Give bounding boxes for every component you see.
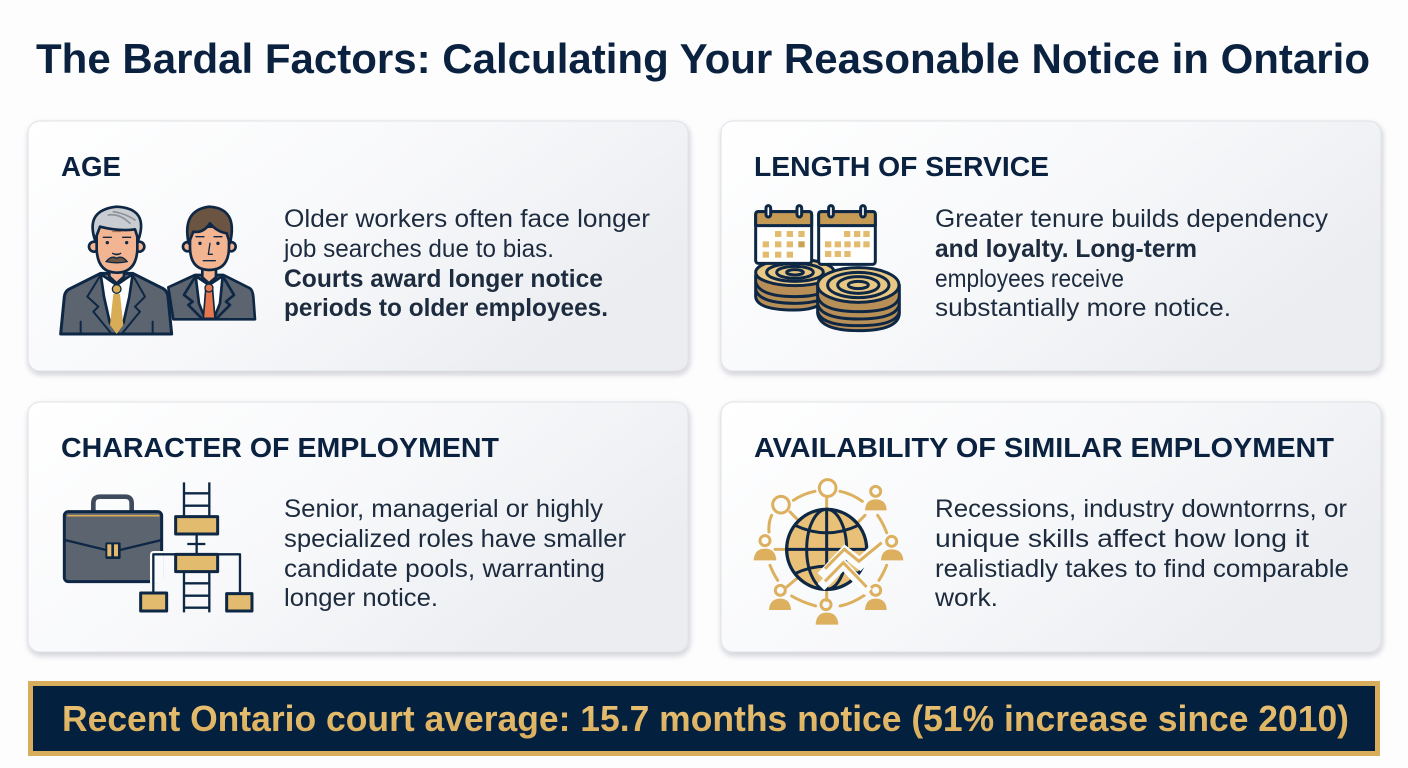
body text: age bbox=[283, 205, 650, 322]
body text: availability of similar employment: Recessions, industry downtorrns, or bbox=[935, 495, 1347, 523]
icon: older and younger workers bbox=[61, 207, 255, 334]
body text: age: Older workers often face longer bbox=[284, 205, 650, 233]
body text: character of employment: candidate pools, warranting bbox=[284, 555, 605, 583]
icon: globe, people network and trend line bbox=[754, 480, 903, 625]
icon: briefcase and org ladder bbox=[64, 482, 252, 612]
body text: length of service bbox=[935, 205, 1329, 322]
body text: length of service: employees receive bbox=[935, 265, 1124, 293]
body text: availability of similar employment: unique skills affect how long it bbox=[935, 525, 1309, 553]
heading: age: AGE bbox=[61, 151, 121, 182]
body text: availability of similar employment: realistiadly takes to find comparable bbox=[935, 555, 1349, 583]
title: The Bardal Factors: Calculating Your Reasonable Notice in Ontario bbox=[36, 35, 1370, 82]
panel: length of service bbox=[721, 121, 1381, 371]
heading: character of employment: CHARACTER OF EMPLOYMENT bbox=[61, 432, 499, 463]
icon: calendars and tree-ring stacks bbox=[756, 206, 899, 331]
heading: length of service: LENGTH OF SERVICE bbox=[754, 151, 1049, 182]
panel: age bbox=[28, 121, 688, 371]
panel: availability of similar employment bbox=[721, 402, 1381, 652]
body text: length of service: and loyalty. Long-term bbox=[935, 235, 1197, 263]
body text: age: periods to older employees. bbox=[284, 294, 608, 322]
body text: age: Courts award longer notice bbox=[284, 265, 603, 293]
body text: character of employment bbox=[284, 495, 626, 612]
body text: character of employment: specialized roles have smaller bbox=[284, 525, 626, 553]
body text: availability of similar employment: work. bbox=[934, 584, 998, 612]
body text: length of service: Greater tenure builds dependency bbox=[935, 205, 1329, 233]
body text: character of employment: Senior, managerial or highly bbox=[284, 495, 604, 523]
body text: age: job searches due to bias. bbox=[283, 235, 554, 263]
heading: availability of similar employment: AVAILABILITY OF SIMILAR EMPLOYMENT bbox=[754, 432, 1334, 463]
banner: key statistic bbox=[28, 681, 1380, 756]
banner text: Recent Ontario court average: 15.7 months notice (51% increase since 2010) bbox=[62, 698, 1349, 739]
panel: character of employment bbox=[28, 402, 688, 652]
body text: availability of similar employment bbox=[934, 495, 1349, 612]
body text: character of employment: longer notice. bbox=[284, 584, 438, 612]
body text: length of service: substantially more notice. bbox=[935, 294, 1231, 322]
